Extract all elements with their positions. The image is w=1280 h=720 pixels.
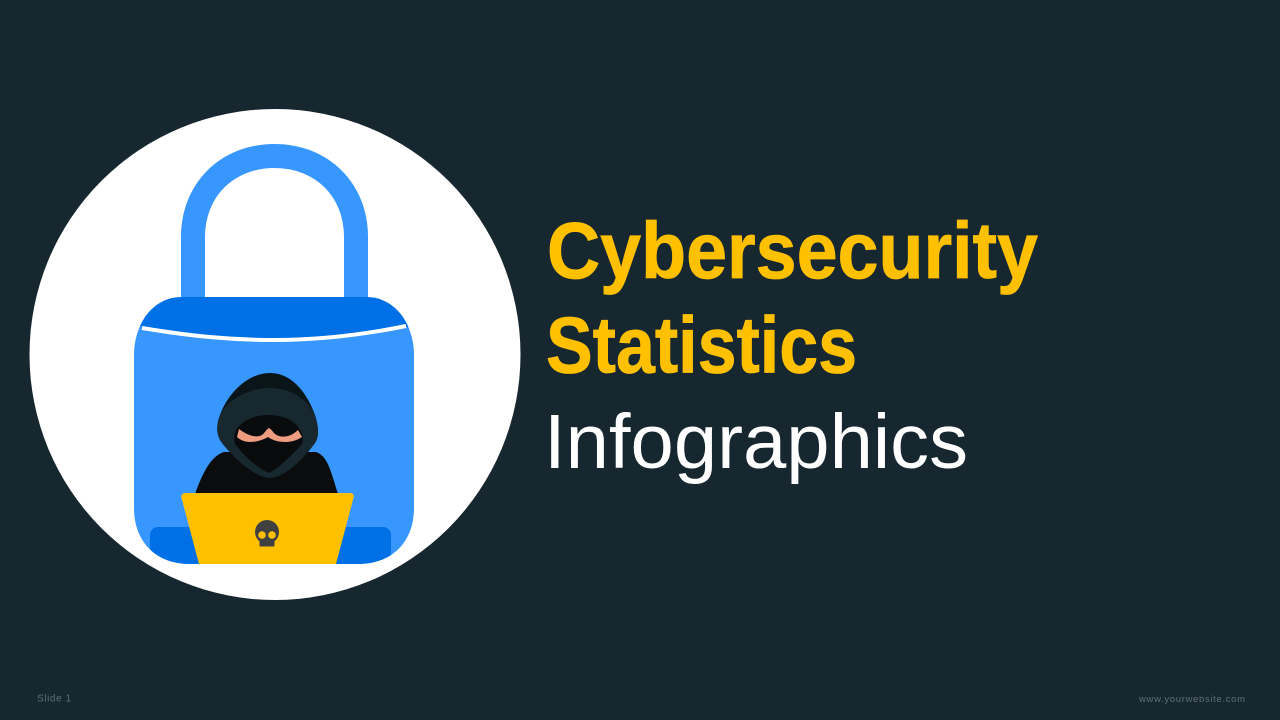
white circle: [30, 109, 520, 600]
hacker skin around eyes: [237, 428, 302, 442]
hacker torso: [195, 452, 338, 494]
icon: yellow laptop: [181, 493, 354, 564]
icon: padlock body: [130, 297, 418, 577]
illustration: padlock and hacker in white circle: [30, 109, 520, 600]
title line: Statistics: Statistics: [546, 300, 857, 390]
title line: Infographics: Infographics: [544, 399, 968, 485]
footer: slide number: Slide 1: [37, 694, 72, 704]
hacker hood: [217, 373, 318, 478]
hacker face and mask: [234, 415, 303, 473]
icon: hacker: [195, 373, 338, 494]
title: [544, 206, 1038, 485]
footer: website: www.yourwebsite.com: [1138, 694, 1245, 705]
icon: padlock shackle: [193, 156, 356, 310]
title line: Cybersecurity: Cybersecurity: [547, 206, 1038, 295]
icon: skull: [255, 520, 279, 546]
